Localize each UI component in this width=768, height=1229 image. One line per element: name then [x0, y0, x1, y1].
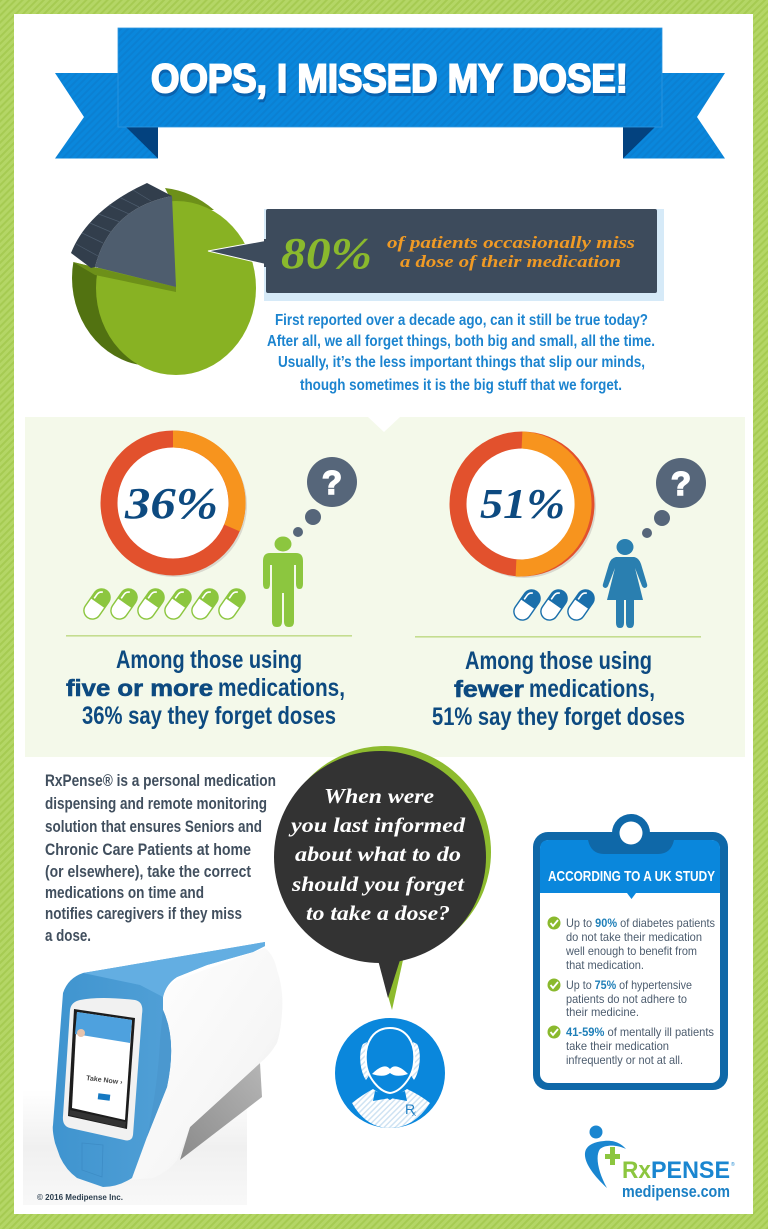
- bullet 3: [548, 1025, 714, 1067]
- bullet 2: patients do not adhere to: [566, 992, 687, 1006]
- bullet 2: their medicine.: [566, 1005, 639, 1019]
- bullet 1: that medication.: [566, 958, 644, 972]
- callout text: of patients occasionally miss: [387, 233, 635, 252]
- text: fewer medications: fewer: [454, 676, 524, 702]
- callout text: a dose of their medication: [400, 252, 621, 271]
- thought bubble: question, woman: ?: [671, 465, 691, 502]
- RxPense description: dispensing and remote monitoring: [45, 795, 267, 813]
- 36% label: 36%: [124, 479, 218, 528]
- intro paragraph: [267, 312, 655, 394]
- text: fewer medications: 51% say they forget doses: [432, 703, 685, 731]
- RxPense description: a dose.: [45, 927, 91, 945]
- bullet 2: [548, 978, 692, 1019]
- text: fewer medications: Among those using: [465, 647, 652, 675]
- 51% label: 51%: [480, 482, 565, 528]
- bullet 3: infrequently or not at all.: [566, 1053, 683, 1067]
- thought bubble: question, man: [293, 457, 357, 537]
- bullet 1: do not take their medication: [566, 930, 702, 944]
- bubble text: to take a dose?: [306, 901, 450, 925]
- RxPense description: [45, 772, 276, 945]
- bubble text: should you forget: [291, 872, 465, 896]
- bubble text: you last informed: [288, 813, 466, 837]
- logo: RxPense: [585, 1126, 735, 1201]
- callout text: [387, 233, 635, 271]
- RxPense description: solution that ensures Seniors and: [45, 818, 262, 836]
- clipboard heading: ACCORDING TO A UK STUDY: [548, 868, 715, 885]
- intro paragraph: After all, we all forget things, both big and small, all the time.: [267, 333, 655, 350]
- title ribbon: [55, 28, 725, 158]
- panel: medication comparison background: [25, 417, 745, 757]
- icon: pharmacist with moustache: [335, 1018, 445, 1128]
- logo: RxPense: PENSE: [651, 1157, 730, 1184]
- icon: pharmacist with moustache: x: [412, 1109, 416, 1118]
- bullet 1: Up to 90% of diabetes patients: [566, 916, 715, 930]
- logo: RxPense: Rx: [622, 1157, 652, 1184]
- thought bubble: question, woman: [642, 458, 706, 538]
- 80% callout: [208, 209, 664, 301]
- RxPense description: Chronic Care Patients at home: [45, 841, 251, 859]
- text: fewer medications: medications,: [529, 675, 655, 703]
- bubble text: When were: [324, 784, 434, 808]
- bullet 1: well enough to benefit from: [565, 944, 697, 958]
- bubble text: about what to do: [295, 842, 461, 866]
- text: five or more medications: medications,: [218, 674, 345, 702]
- speech bubble question: [274, 746, 491, 1010]
- text: five or more medications: five or more: [66, 675, 213, 701]
- bullet 2: Up to 75% of hypertensive: [566, 978, 692, 992]
- logo: RxPense: ®: [731, 1161, 735, 1168]
- icons: six green pills: [81, 586, 248, 622]
- donut chart: 51%: [452, 434, 596, 578]
- bubble text: [288, 784, 466, 925]
- icons: three blue pills: [511, 587, 597, 623]
- copyright: © 2016 Medipense Inc.: [37, 1192, 123, 1202]
- text: five or more medications: [66, 646, 345, 730]
- 3D pie chart: 80%: [60, 175, 256, 375]
- product photo: RxPense device: Take Now ›: [86, 1075, 123, 1087]
- bullet 1: [548, 916, 715, 972]
- intro paragraph: though sometimes it is the big stuff that we forget.: [300, 377, 622, 394]
- RxPense description: notifies caregivers if they miss: [45, 905, 242, 923]
- RxPense description: RxPense® is a personal medication: [45, 772, 276, 790]
- text: five or more medications: Among those using: [116, 646, 302, 674]
- text: fewer medications: [432, 647, 685, 731]
- product photo: RxPense device: [23, 942, 282, 1205]
- 80% figure: 80%: [281, 229, 372, 278]
- icon: pharmacist with moustache: R: [405, 1101, 415, 1117]
- icon: woman: [603, 539, 647, 628]
- panel: UK study clipboard: [533, 814, 728, 1090]
- RxPense description: (or elsewhere), take the correct: [45, 863, 251, 881]
- title: OOPS, I MISSED MY DOSE!: [151, 57, 628, 101]
- icon: man: [263, 536, 303, 627]
- intro paragraph: Usually, it’s the less important things that slip our minds,: [278, 354, 645, 371]
- RxPense description: medications on time and: [45, 884, 204, 902]
- text: five or more medications: 36% say they forget doses: [82, 702, 336, 730]
- bullet 3: take their medication: [566, 1039, 669, 1053]
- thought bubble: question, man: ?: [322, 464, 342, 501]
- donut chart: 36%: [103, 433, 247, 577]
- intro paragraph: First reported over a decade ago, can it still be true today?: [275, 312, 648, 329]
- bullet 3: 41-59% of mentally ill patients: [566, 1025, 714, 1039]
- logo: RxPense: medipense.com: [622, 1183, 730, 1201]
